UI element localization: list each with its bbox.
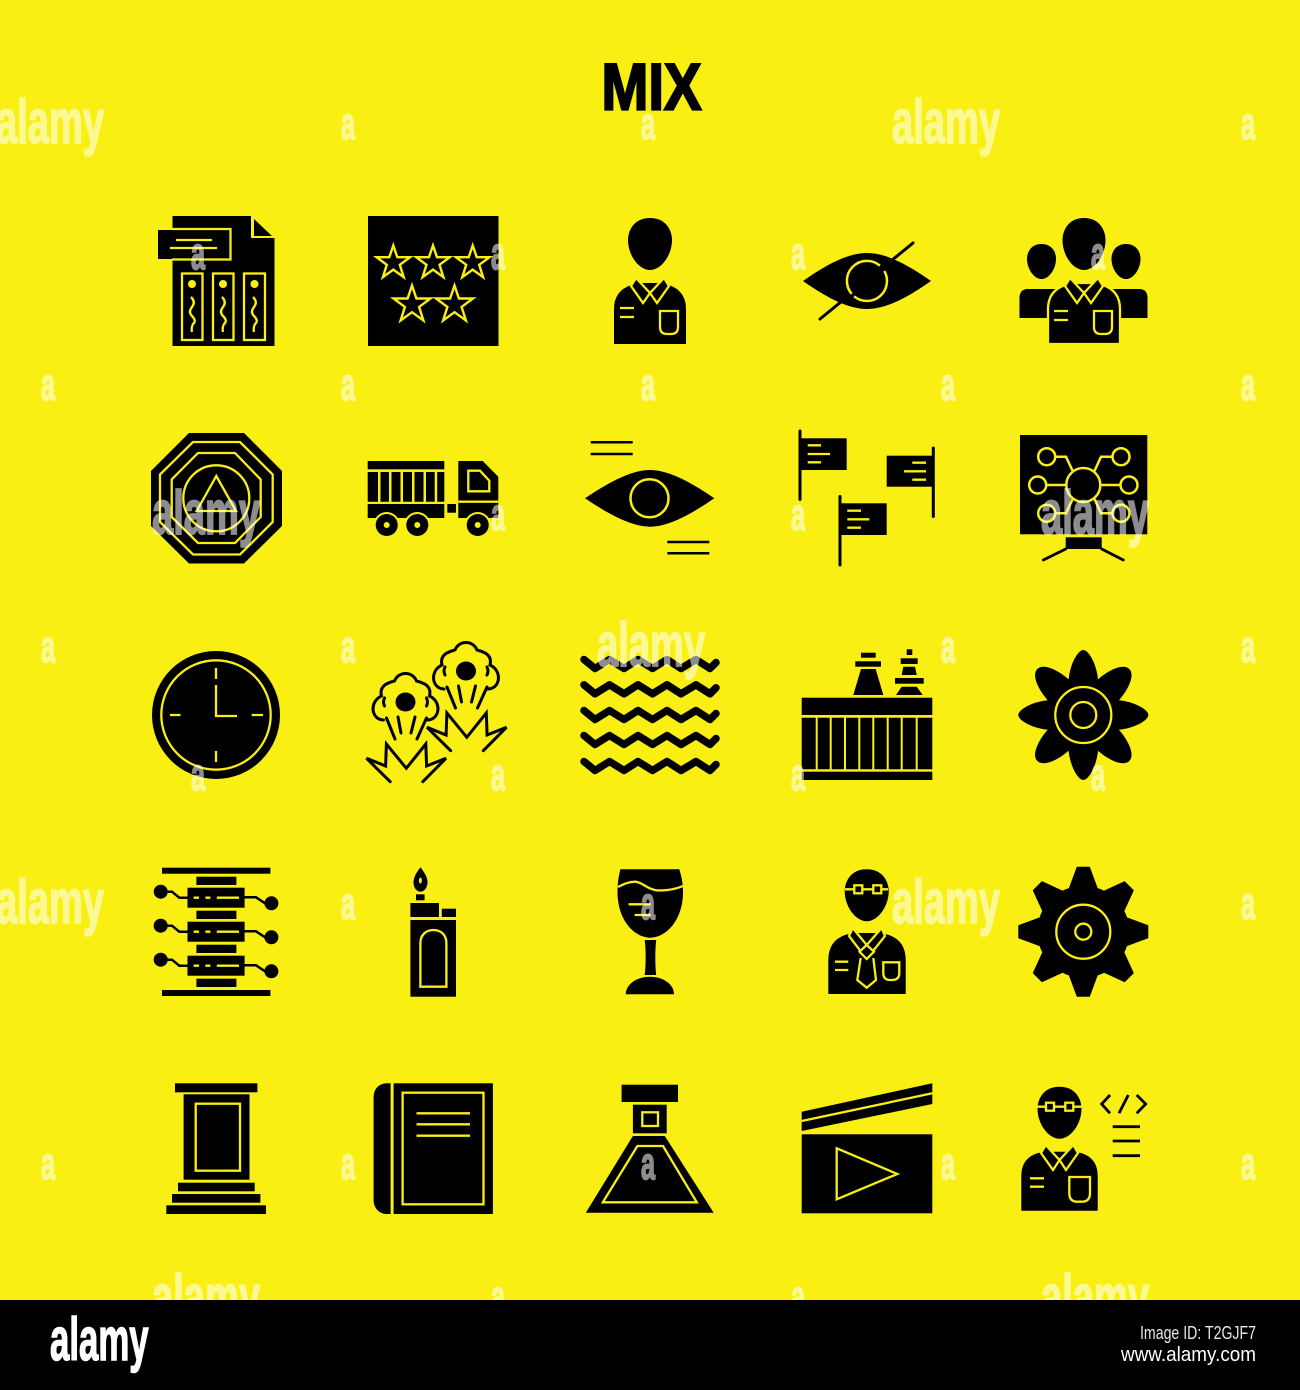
icon: eye with speed lines [585, 442, 714, 553]
watermark layer: alamy [892, 86, 1000, 156]
watermark layer: a [341, 878, 356, 929]
watermark layer: a [341, 1138, 356, 1189]
icon: five star rating [368, 216, 498, 346]
icon: wine glass [618, 869, 683, 994]
icon: software developer [1021, 1087, 1146, 1211]
watermark layer: a [1241, 98, 1256, 149]
watermark layer: alamy [152, 477, 260, 547]
watermark layer: a [491, 749, 506, 800]
watermark layer: a [641, 359, 656, 410]
icon: employee with glasses and tie [828, 869, 906, 994]
icon: dump truck [368, 461, 498, 538]
icon: transformer with insulators [802, 649, 932, 780]
watermark layer: a [641, 1138, 656, 1189]
watermark layer: a [191, 749, 206, 800]
watermark layer: a [491, 228, 506, 279]
watermark layer: a [941, 1138, 956, 1189]
icon: octagon warning sign [151, 433, 282, 564]
watermark layer: a [1241, 621, 1256, 672]
watermark layer: a [491, 489, 506, 540]
watermark layer: alamy [597, 609, 705, 679]
watermark layer: a [491, 1271, 506, 1322]
watermark layer: alamy [1041, 1261, 1149, 1331]
icon: team of employees [1020, 218, 1148, 344]
icon: explosions [366, 642, 506, 782]
footer logo: alamy [50, 1307, 149, 1373]
icon: document with binders [158, 216, 274, 346]
icon: crossed eye [803, 243, 931, 319]
icon: water waves [584, 660, 716, 770]
website: www.alamy.com [1120, 1344, 1256, 1366]
watermark layer: a [1241, 878, 1256, 929]
icon: gear [1018, 867, 1148, 997]
watermark layer: a [341, 98, 356, 149]
watermark layer: a [1091, 228, 1106, 279]
icon: employee [614, 218, 686, 344]
watermark layer: a [941, 359, 956, 410]
watermark layer: a [41, 359, 56, 410]
watermark layer: a [791, 489, 806, 540]
watermark layer: a [341, 621, 356, 672]
watermark layer: alamy [892, 866, 1000, 936]
watermark layer: alamy [1041, 477, 1149, 547]
icon: notebook [374, 1083, 493, 1214]
icon: monitor with network diagram [1020, 435, 1147, 560]
icon: laboratory flask [586, 1085, 714, 1213]
icon: three flags [800, 431, 933, 565]
watermark layer: a [41, 621, 56, 672]
watermark layer: a [641, 878, 656, 929]
watermark layer: a [41, 1138, 56, 1189]
watermark layer: a [341, 359, 356, 410]
icon: flower [1018, 650, 1148, 780]
icon: cigarette lighter [410, 867, 456, 997]
watermark layer: a [791, 228, 806, 279]
icon: pedestal column [166, 1083, 266, 1214]
icon: wall clock [152, 651, 280, 779]
footer bar [0, 1300, 1300, 1390]
icon: server network [154, 868, 278, 996]
icon: video clapperboard [802, 1083, 932, 1213]
image id: Image ID: T2GJF7 [1140, 1323, 1256, 1343]
watermark layer: a [1091, 749, 1106, 800]
title: MIX [602, 50, 702, 124]
watermark layer: a [791, 1271, 806, 1322]
watermark layer: a [941, 621, 956, 672]
watermark layer: a [1241, 1138, 1256, 1189]
watermark layer: a [1241, 359, 1256, 410]
watermark layer: a [641, 98, 656, 149]
watermark layer: alamy [152, 1261, 260, 1331]
watermark layer: a [791, 749, 806, 800]
watermark layer: a [191, 228, 206, 279]
